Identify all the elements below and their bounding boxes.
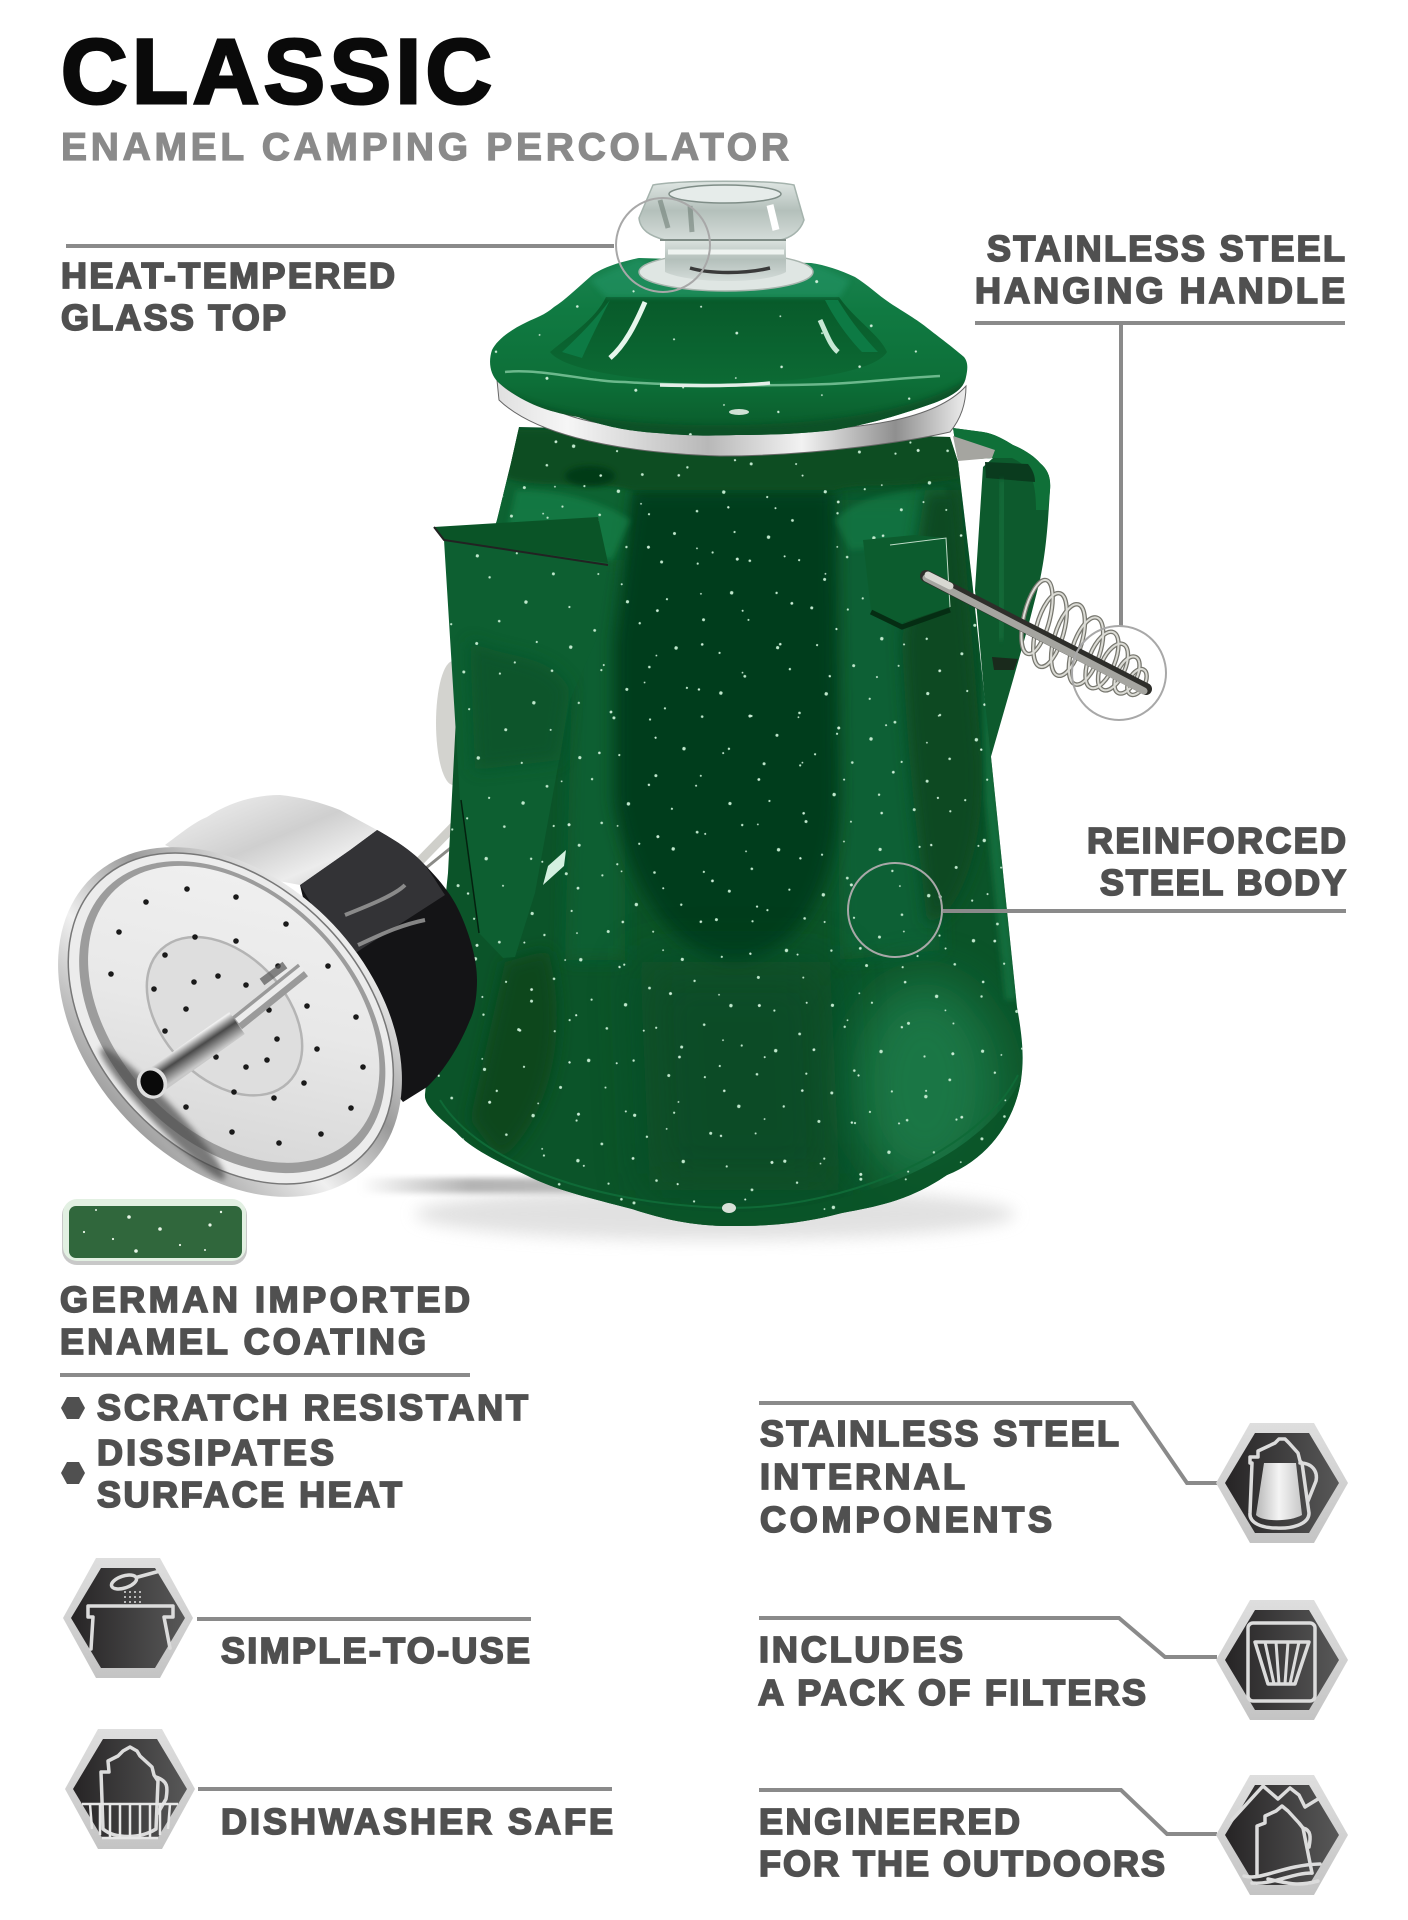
floor shadow [360,1178,1015,1240]
rear handle strap [953,428,1050,760]
glass knob [639,181,813,291]
title: classic: CLASSIC [61,21,492,123]
bullet list [61,1387,528,1515]
icon: filter pack [1216,1600,1348,1720]
callout: reinforced steel body: STEEL BODY [1100,862,1346,903]
basket cup [165,795,477,1102]
icon: pouring scoop over pot [63,1558,193,1678]
feature: engineered for the outdoors: ENGINEERED [759,1801,1020,1842]
callout: stainless steel hanging handle: HANGING HANDLE [975,270,1345,311]
side bracket [863,535,950,627]
spout [434,517,608,958]
callout: stainless steel hanging handle: STAINLESS STEEL [987,228,1345,269]
basket wire and silver behind spout [415,661,470,872]
feature: stainless steel internal components [759,1403,1348,1543]
feature: stainless steel internal components: COMPONENTS [760,1499,1052,1540]
callout: heat-tempered glass top [61,198,710,338]
percolator illustration [400,181,1151,1240]
callout: heat-tempered glass top: GLASS TOP [61,297,286,338]
callout: reinforced steel body: REINFORCED [1087,820,1346,861]
enamel body [424,427,1023,1226]
text block: german imported enamel coating: GERMAN IMPORTED [60,1279,470,1320]
feature: dishwasher safe [65,1729,613,1849]
feature: engineered for the outdoors: FOR THE OUTDOORS [759,1843,1165,1884]
feature: stainless steel internal components: STAINLESS STEEL [760,1413,1119,1454]
basket holes [108,886,366,1146]
callout: heat-tempered glass top: HEAT-TEMPERED [61,255,395,296]
basket disc [58,847,402,1197]
text block: german imported enamel coating: ENAMEL COATING [60,1321,426,1362]
icon: percolator outdoors [1216,1775,1348,1895]
icon: percolator with silver interior [1216,1423,1348,1543]
feature: simple-to-use [63,1558,531,1678]
lid [480,255,980,440]
text block: german imported enamel coating [60,1279,470,1375]
callout: reinforced steel body [848,820,1346,957]
bullet list: DISSIPATES [97,1432,334,1473]
wire handle with spring [926,575,1151,698]
feature: includes a pack of filters [758,1600,1348,1720]
silver rim [497,380,966,456]
feature: dishwasher safe: DISHWASHER SAFE [221,1801,613,1842]
feature: includes a pack of filters: A PACK OF FILTERS [758,1672,1146,1713]
bullet list: SURFACE HEAT [97,1474,402,1515]
icon: percolator in dish rack [65,1729,195,1849]
feature: stainless steel internal components: INTERNAL [760,1456,965,1497]
feature: engineered for the outdoors [759,1775,1348,1895]
percolator stem [131,965,303,1104]
enamel swatch [62,1199,247,1265]
feature: includes a pack of filters: INCLUDES [759,1629,963,1670]
callout: stainless steel hanging handle [975,228,1345,720]
filter basket [58,795,477,1197]
bullet list: SCRATCH RESISTANT [97,1387,528,1428]
feature: simple-to-use: SIMPLE-TO-USE [221,1630,530,1671]
subtitle: ENAMEL CAMPING PERCOLATOR [61,126,789,169]
